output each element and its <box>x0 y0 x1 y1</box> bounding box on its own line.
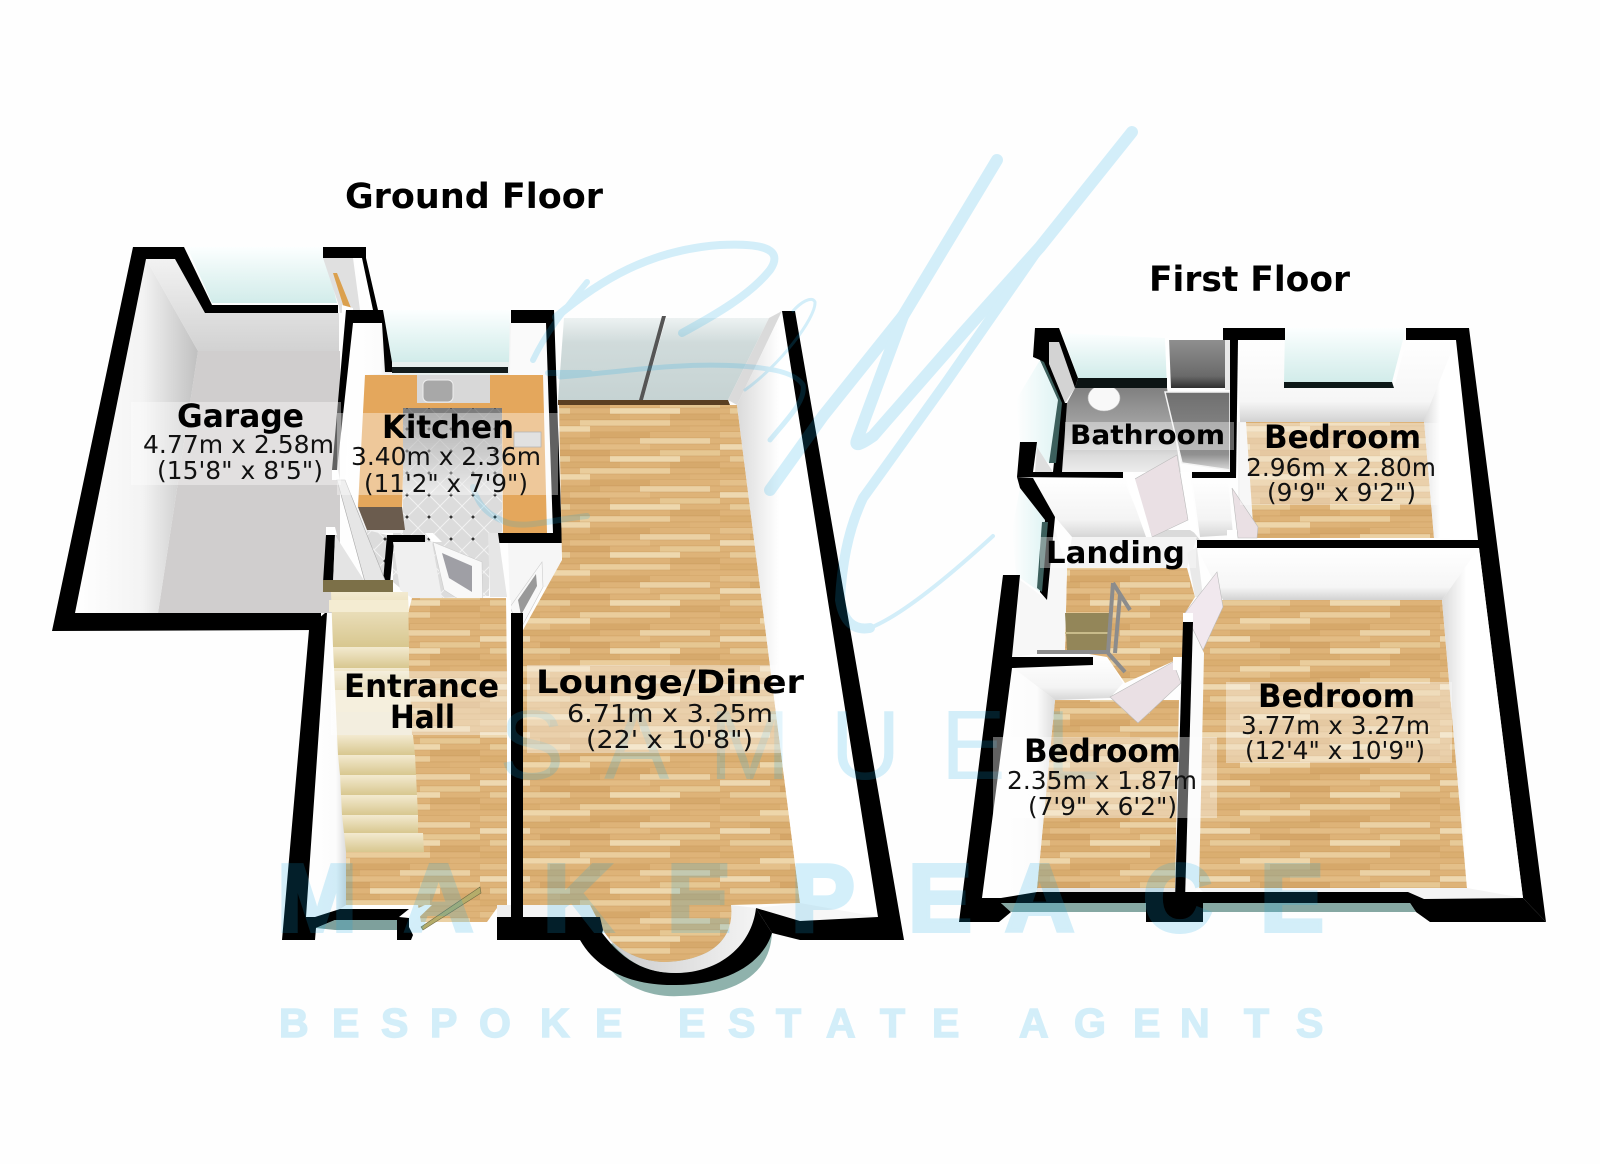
watermark: company name: SAMUEL <box>499 690 1100 800</box>
label: large bedroom: (12'4" x 10'9") <box>1245 736 1425 765</box>
room: garage <box>52 247 378 631</box>
room: kitchen <box>323 310 562 598</box>
icon: lounge door <box>510 562 543 630</box>
watermark: company name: MAKEPEACE <box>277 845 1324 952</box>
label: small bedroom: (7'9" x 6'2") <box>1028 792 1177 821</box>
label: small bedroom <box>993 732 1217 821</box>
icon: kitchen door <box>433 542 483 615</box>
label: kitchen <box>337 408 558 498</box>
room: bathroom <box>1012 328 1238 592</box>
label: top bedroom: (9'9" x 9'2") <box>1267 478 1416 507</box>
room: small bedroom <box>959 575 1203 922</box>
label: large bedroom: 3.77m x 3.27m <box>1241 711 1430 740</box>
icon: stair rail <box>1037 583 1130 672</box>
label: kitchen: Kitchen <box>382 408 514 446</box>
label: lounge/diner <box>527 663 815 754</box>
icon: bedroom door <box>1232 488 1258 538</box>
label: small bedroom: 2.35m x 1.87m <box>1007 766 1197 795</box>
label: large bedroom <box>1226 677 1452 765</box>
icon: bedroom door <box>1185 572 1223 650</box>
watermark: signature flourish <box>473 132 1132 628</box>
label: garage <box>131 397 341 485</box>
label: entrance hall: Entrance <box>344 667 499 705</box>
label: top bedroom: Bedroom <box>1264 418 1421 456</box>
room: top bedroom <box>1197 328 1546 922</box>
icon: bedroom door <box>1110 662 1181 723</box>
label: lounge/diner: (22' x 10'8") <box>586 725 753 754</box>
label: lounge/diner: Lounge/Diner <box>536 663 804 701</box>
icon: front door <box>421 887 481 930</box>
label: garage: Garage <box>177 397 304 435</box>
room: lounge/diner <box>497 311 904 996</box>
room: large bedroom <box>1185 548 1546 922</box>
staircase <box>323 580 424 852</box>
label: kitchen: (11'2" x 7'9") <box>364 469 528 498</box>
heading: first floor: First Floor <box>1149 260 1351 300</box>
bay window <box>580 905 772 996</box>
room: inner hall walls and doors <box>393 533 562 630</box>
room: landing <box>1012 455 1233 683</box>
label: top bedroom <box>1240 418 1456 507</box>
label: top bedroom: 2.96m x 2.80m <box>1246 453 1436 482</box>
room: entrance hall <box>282 580 523 940</box>
heading: ground floor: Ground Floor <box>345 177 604 217</box>
label: entrance hall: Hall <box>390 698 455 736</box>
staircase: upper flight <box>1065 613 1112 650</box>
floor plan: first floor <box>959 328 1546 922</box>
label: entrance hall <box>331 667 508 736</box>
label: landing: Landing <box>1046 536 1185 571</box>
watermark: company name <box>0 690 1324 1046</box>
label: large bedroom: Bedroom <box>1258 677 1415 715</box>
label: bathroom: Bathroom <box>1070 420 1225 451</box>
watermark: company name: BESPOKE ESTATE AGENTS <box>0 1000 1323 1046</box>
label: garage: (15'8" x 8'5") <box>157 456 323 485</box>
label: small bedroom: Bedroom <box>1024 732 1181 770</box>
label: garage: 4.77m x 2.58m <box>143 430 334 459</box>
label: lounge/diner: 6.71m x 3.25m <box>567 699 773 728</box>
icon: bathroom door <box>1133 455 1188 537</box>
icon: washbasin <box>1088 385 1120 411</box>
label: kitchen: 3.40m x 2.36m <box>351 442 541 471</box>
floor plan: ground floor <box>52 247 904 996</box>
